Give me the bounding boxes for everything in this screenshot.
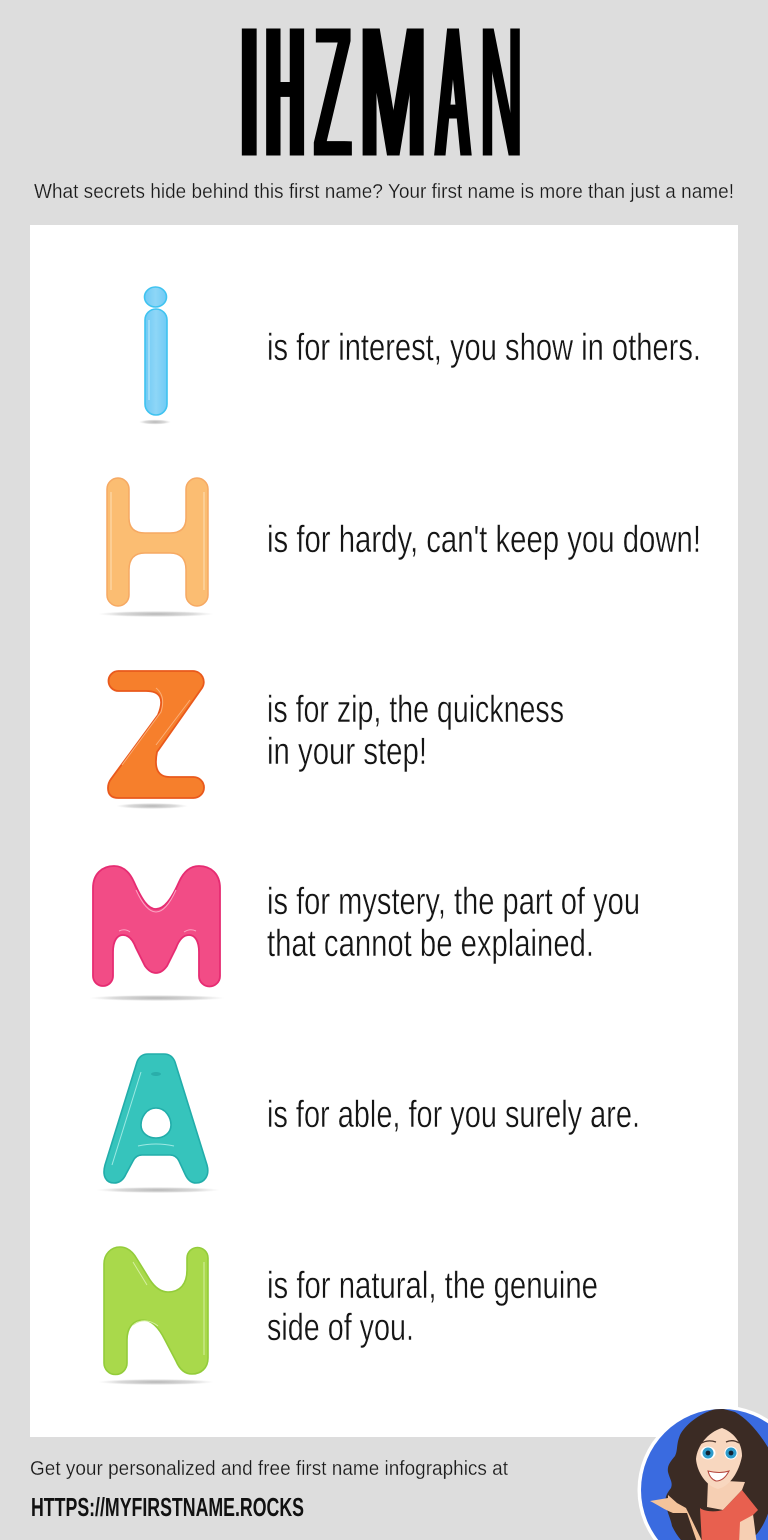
text: Z: is for zip, the quickness: [267, 689, 564, 731]
footer link: HTTPS://MYFIRSTNAME.ROCKS: [31, 1492, 304, 1522]
eyebrows: [700, 1441, 739, 1444]
icon: letter M: [89, 866, 225, 1001]
letter H row: [98, 478, 701, 617]
right arm: [739, 1514, 757, 1540]
subtitle: What secrets hide behind this first name? Your first name is more than just a name!: [34, 181, 734, 203]
panel: letters: [30, 225, 738, 1437]
eyes: [700, 1446, 738, 1460]
text: Z: in your step!: [267, 731, 427, 773]
icon: letter I: [139, 287, 171, 424]
smile: [708, 1471, 729, 1481]
icon: letter H: [98, 478, 214, 617]
footer text: Get your personalized and free first name infographics at: [30, 1458, 508, 1480]
text: M: is for mystery, the part of you: [267, 881, 640, 923]
text: M: [267, 881, 640, 965]
letter Z row: [108, 671, 564, 809]
letter M row: [89, 866, 640, 1001]
left arm and hand: [650, 1495, 704, 1540]
text: N: is for natural, the genuine: [267, 1265, 598, 1307]
text: A: is for able, for you surely are.: [267, 1094, 640, 1136]
letter N row: [98, 1247, 598, 1385]
text: N: [267, 1265, 598, 1349]
face: [696, 1428, 742, 1489]
letter I row: [139, 287, 701, 424]
letter A row: [96, 1054, 640, 1193]
shirt: [700, 1490, 758, 1540]
text: M: that cannot be explained.: [267, 923, 594, 965]
text: Z: [267, 689, 564, 773]
text: N: side of you.: [267, 1307, 414, 1349]
hair: [665, 1408, 768, 1540]
neck: [707, 1480, 745, 1510]
icon: letter N: [98, 1247, 214, 1385]
avatar: [638, 1406, 768, 1540]
icon: letter A: [96, 1054, 220, 1193]
icon: letter Z: [108, 671, 204, 809]
title: [233, 0, 520, 196]
